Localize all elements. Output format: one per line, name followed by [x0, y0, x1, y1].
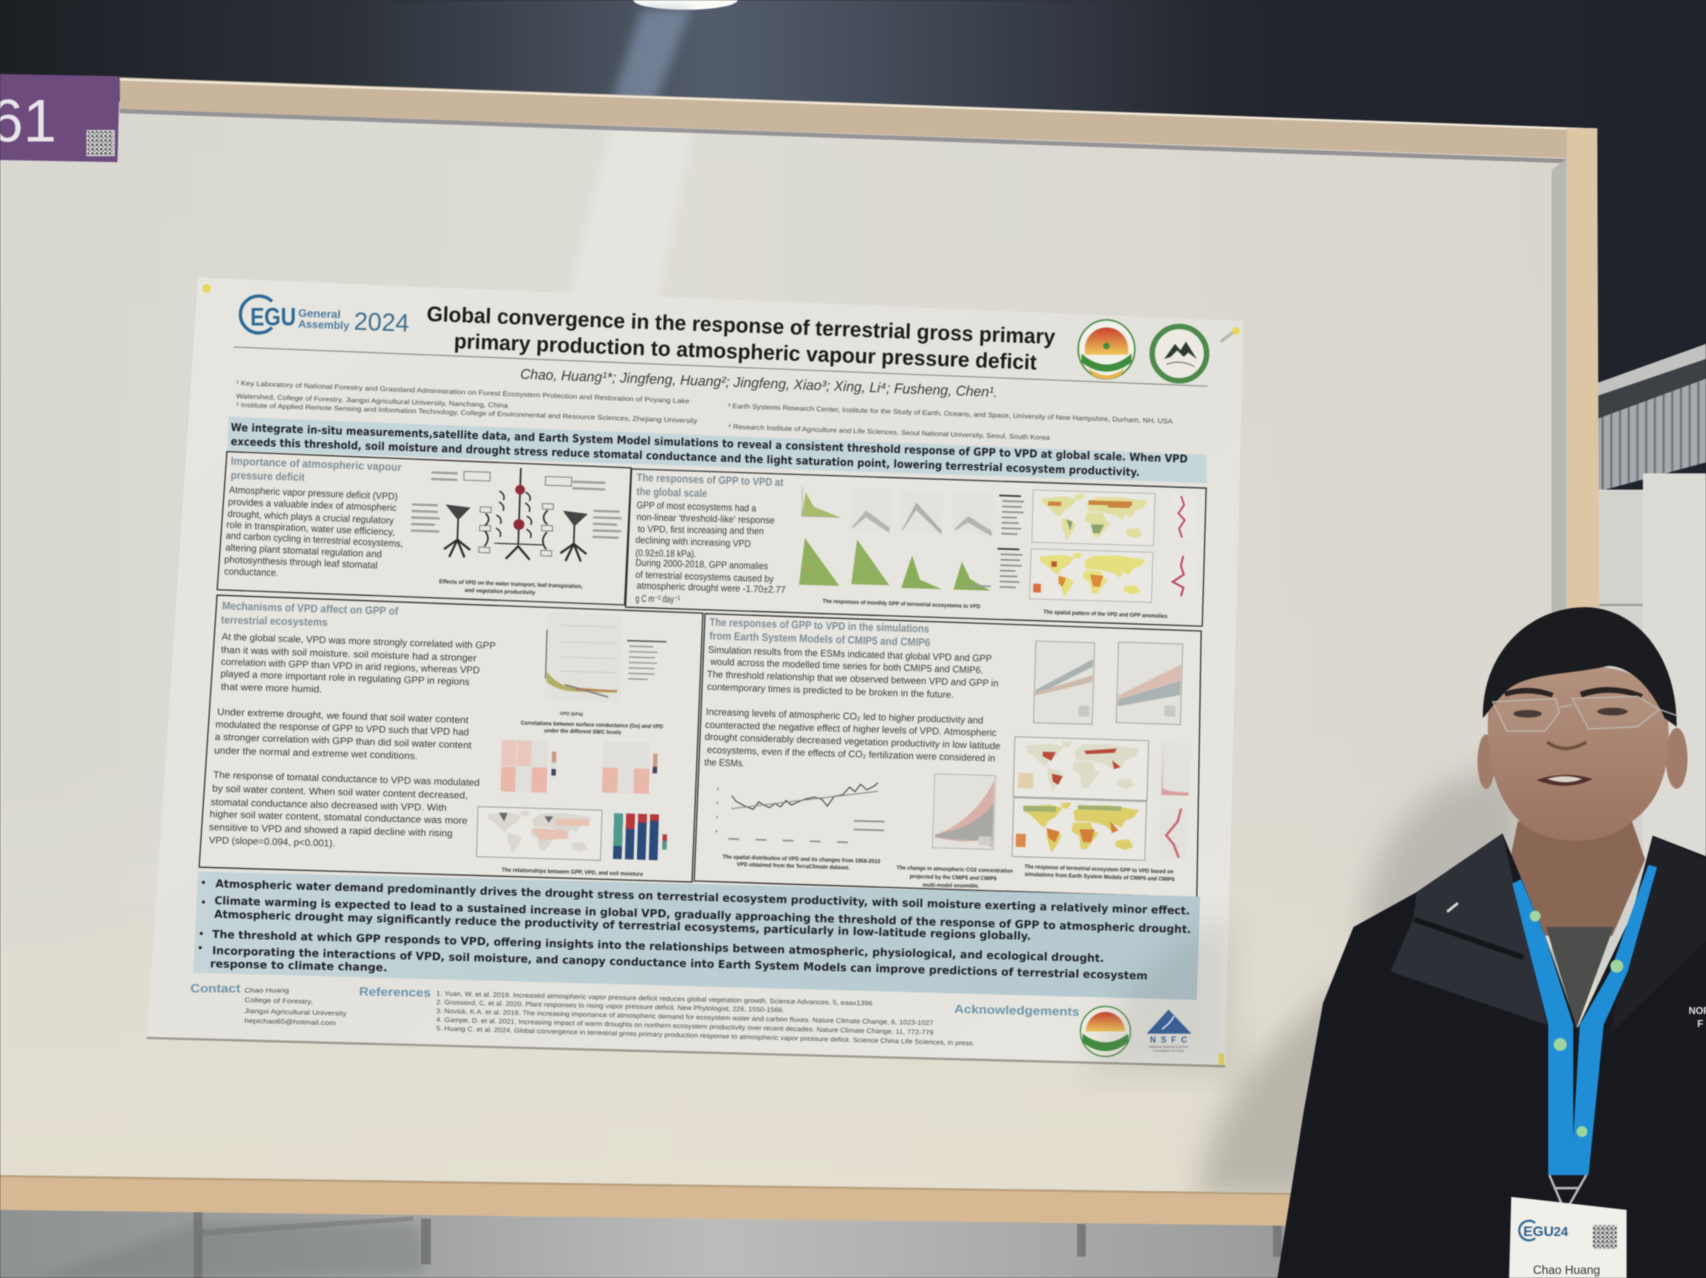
ears [1478, 728, 1688, 789]
legends: ecosystem type lists [996, 495, 1024, 588]
light reflection on board [560, 114, 696, 326]
contact: Jiangxi Agricultural University [244, 1008, 348, 1018]
text block: mechanisms paragraph 2: Under extreme drought, we found that soil water content [217, 707, 469, 726]
logo: EGU General Assembly 2024 [240, 296, 410, 338]
text block: importance body: provides a valuable index of atmospheric [228, 497, 397, 514]
logo: NSFC: NSFC [1150, 1035, 1187, 1044]
caption: simulated response: The response of terrestrial ecosystem GPP to VPD based on [1024, 864, 1174, 875]
caption: simulated response: simulations from Earth System Models of CMIP5 and CMIP6 [1024, 872, 1175, 883]
map: relationships between GPP, VPD and soil moisture [476, 807, 602, 860]
panel: mechanisms of VPD affect on GPP [199, 595, 703, 882]
logo: EGU General Assembly 2024: 2024 [353, 308, 410, 338]
ventilation duct and wall at right [1597, 344, 1706, 1251]
chart a: VPD projection [1033, 641, 1095, 724]
jacket collar [1390, 833, 1547, 1025]
chart: surface conductance versus VPD [544, 612, 667, 720]
contact: College of Forestry, [244, 997, 313, 1006]
chart: correlation heatmap b [602, 741, 658, 794]
contact [190, 981, 348, 1027]
captions: time series and CO2: projected by the CMIP5 and CMIP6 [910, 874, 997, 882]
text block: CMIP paragraph 1: Simulation results from the ESMs indicated that global VPD and GPP [708, 645, 992, 665]
heading: mechanisms: terrestrial ecosystems [221, 614, 328, 629]
heading: CMIP [709, 617, 930, 649]
text block: responses body: During 2000-2018, GPP anomalies [635, 558, 768, 572]
heading: importance: pressure deficit [231, 470, 305, 484]
panel: the responses of GPP to VPD at the global scale [626, 469, 1206, 626]
text block: responses body: of terrestrial ecosystems caused by [635, 570, 774, 585]
text block: mechanisms paragraph 2: a stronger correlation with GPP than did soil water content [215, 732, 472, 751]
floor [0, 1202, 1306, 1278]
chart: VPD anomaly latitude profile [1169, 495, 1197, 540]
name badge [1509, 1197, 1627, 1278]
heading: importance: Importance of atmospheric vapour [231, 456, 402, 474]
text block: responses body: to VPD, first increasing and then [638, 524, 764, 537]
text block: mechanisms paragraph 3: sensitive to VPD and showed a rapid decline with rising [209, 822, 453, 840]
nose [1547, 742, 1586, 749]
text block: importance body [224, 485, 403, 579]
text block: mechanisms paragraph 3: higher soil water content, stomatal conductance was more [210, 809, 468, 827]
mouth [1536, 775, 1593, 786]
text block: mechanisms paragraph 3: The response of tomatal conductance to VPD was modulated [213, 770, 480, 789]
text block: importance body: conductance. [224, 566, 279, 579]
references: 4. Gampe, D. et al. 2021. Increasing impact of warm droughts on northern ecosystem productivity over recent decades. Nature Climate Change, 11, 772-779 [436, 1017, 934, 1037]
summary band: exceeds this threshold, soil moisture and drought stress reduce stomatal conductance and the light saturation point, lowering terrestrial ecosystem productivity. [231, 435, 1140, 479]
text block: mechanisms paragraph 3: by soil water content. When soil water content decreased, [212, 784, 468, 802]
text block: responses body: (0.92±0.18 kPa). [635, 548, 696, 560]
affiliations: Watershed, College of Forestry, Jiangxi Agricultural University, Nanchang, China [236, 393, 508, 410]
references: 5. Huang C. et al. 2024. Global convergence in terrestrial gross primary production response to atmospheric vapor pressure deficit. Science China Life Sciences, in press. [436, 1025, 975, 1047]
captions: time series and CO2: The change in atmospheric CO2 concentration [896, 865, 1014, 875]
caption: simulated response [1024, 864, 1175, 883]
panel: responses of GPP to VPD in CMIP5 and CMIP6 [694, 614, 1201, 898]
poster sheet [147, 277, 1244, 1067]
caption: conductance chart [521, 721, 663, 736]
panel: importance of atmospheric vapour pressure deficit [217, 452, 631, 605]
captions: time series and CO2: VPD obtained from the TerraClimate dataset. [737, 862, 850, 871]
logo: Jiangxi Agricultural University [1078, 320, 1135, 379]
affiliations: ¹ Key Laboratory of National Forestry and Grassland Administration on Forest Ecosystem Protection and Restoration of Poyang Lake [236, 380, 690, 405]
text block: importance body: role in transpiration, water use efficiency, [226, 520, 395, 538]
chart: surface conductance versus VPD: VPD (kPa) [560, 711, 583, 718]
text block: mechanisms paragraph 1: that were more humid. [221, 682, 322, 695]
ceiling lamp [609, 0, 738, 109]
text block: mechanisms paragraph 1: At the global scale, VPD was more strongly correlated with GPP [222, 632, 496, 652]
glasses [1493, 696, 1678, 731]
person presenting the poster [1277, 607, 1706, 1278]
lanyard clip [1549, 1175, 1586, 1206]
text block: responses body [635, 500, 786, 605]
captions: responses panel: The responses of monthly GPP of terrestrial ecosystems to VPD [822, 599, 980, 610]
chart: monthly GPP response small multiples, bottom row [799, 538, 992, 591]
text block: mechanisms paragraph 1 [220, 632, 496, 695]
text block: importance body: photosynthesis through leaf stomatal [224, 555, 378, 571]
references: 2. Grossiord, C. et al. 2020. Plant responses to rising vapor pressure deficit. New Phytologist, 226, 1550-1566. [436, 999, 785, 1014]
acknowledgements: Acknowledgements [954, 1002, 1080, 1019]
references: References [359, 985, 431, 1000]
text block: mechanisms paragraph 3 [209, 770, 480, 850]
summary band [227, 417, 1207, 483]
contact: hepichao65@hotmail.com [244, 1018, 336, 1027]
chart: correlation heatmap a [500, 739, 557, 793]
map: spatial pattern of GPP anomalies [1030, 549, 1153, 602]
heading: CMIP: The responses of GPP to VPD in the simulations [709, 617, 929, 636]
text block: conclusions: Atmospheric drought may significantly reduce the productivity of terrestrial ecosystems, particularly in low-latitude regions globally. [214, 908, 1031, 943]
text block: mechanisms paragraph 1: played a more important role in regulating GPP in regions [220, 669, 470, 688]
name badge: EGU [1523, 1223, 1554, 1239]
header rule [234, 347, 1208, 386]
text block: conclusions: Climate warming is expected to lead to a sustained increase in global VPD, gradually approaching the threshold of the response of GPP to atmospheric drought. [214, 894, 1191, 936]
text block: responses body: g C m⁻² day⁻¹ [635, 594, 680, 605]
caption: plant diagram [439, 579, 583, 596]
conclusions band [193, 872, 1200, 1000]
map c: change in GPP response [1013, 737, 1149, 801]
logo: university, footer [1080, 1006, 1130, 1056]
chart: GPP anomaly latitude profile [1167, 554, 1196, 599]
affiliations: ⁴ Research Institute of Agriculture and Life Sciences, Seoul National University, Seoul, South Korea [728, 424, 1050, 442]
chart d: latitude profile [1159, 743, 1191, 796]
text block: mechanisms paragraph 3: VPD (slope=0.094, p<0.001). [209, 835, 335, 850]
face [1488, 666, 1669, 841]
text block: conclusions: Incorporating the interactions of VPD, soil moisture, and canopy conductance into Earth System Models can improve predictions of terrestrial ecosystem [212, 944, 1148, 983]
caption: plant diagram: Effects of VPD on the water transport, leaf transpiration, [439, 579, 583, 590]
logo: forestry college mountain seal [1152, 326, 1207, 381]
map: spatial pattern of VPD anomalies [1032, 490, 1155, 546]
neck [1510, 821, 1645, 936]
heading: responses: the global scale [636, 486, 707, 500]
caption: relationships: The relationships between GPP, VPD, and soil moisture [502, 868, 643, 878]
name badge: Chao Huang [1533, 1263, 1600, 1277]
text block: CMIP paragraph 1: would across the modelled time series for both CMIP5 and CMIP6. [709, 657, 983, 676]
text block: importance body: and carbon cycling in terrestrial ecosystems, [226, 531, 403, 550]
captions: time series and CO2: multi-model ensemble. [923, 883, 980, 890]
chart: monthly GPP response small multiples, top row [801, 487, 994, 536]
contact: Contact [190, 981, 240, 995]
map e: GPP response to VPD in simulations [1012, 798, 1147, 860]
text block: CMIP paragraph 2: the ESMs. [704, 757, 745, 769]
board support legs [33, 1210, 1282, 1278]
captions: time series and CO2: The spatial distribution of VPD and its changes from 1958-2010 [722, 854, 880, 865]
title [426, 303, 1056, 375]
eyebrows [1504, 687, 1643, 699]
icon: QR code [87, 131, 114, 156]
text block: conclusions: The threshold at which GPP responds to VPD, offering insights into the relationships between atmospheric, physiological, and ecological drought. [212, 928, 1104, 965]
text block: responses body: non-linear 'threshold-like' response [636, 512, 775, 526]
logo: NSFC [1147, 1010, 1191, 1053]
chart: VPD time series 1958-2010 [716, 778, 886, 844]
push pins [202, 284, 1240, 1065]
references [359, 985, 975, 1047]
text block: mechanisms paragraph 1: than it was with soil moisture. soil moisture had a stronger [221, 645, 478, 664]
heading: responses: The responses of GPP to VPD at [636, 472, 784, 489]
t-shirt [1546, 927, 1614, 1028]
logo: EGU General Assembly 2024: General [298, 308, 341, 321]
references: 1. Yuan, W. et al. 2019. Increased atmospheric vapor pressure deficit reduces global vegetation growth. Science Advances, 5, eaax1396 [436, 991, 873, 1007]
affiliations: ³ Earth Systems Research Center, Institute for the Study of Earth, Oceans, and Space, University of New Hampshire, Durham, NH, USA [728, 403, 1173, 426]
text block: CMIP paragraph 2: counteracted the negative effect of higher levels of VPD. Atmospheric [705, 720, 997, 739]
text block: CMIP paragraph 2: Increasing levels of atmospheric CO₂ led to higher productivity and [706, 707, 983, 727]
captions: time series and CO2 [722, 854, 1014, 890]
jacket logo: F [1697, 1019, 1703, 1030]
authors: Chao, Huang¹*; Jingfeng, Huang²; Jingfeng, Xiao³; Xing, Li⁴; Fusheng, Chen¹. [520, 366, 998, 400]
affiliations: ² Institute of Applied Remote Sensing and Information Technology, College of Environmental and Resource Sciences, Zhejiang University [236, 402, 698, 425]
heading: mechanisms: Mechanisms of VPD affect on GPP of [222, 600, 399, 618]
eyes [1513, 708, 1628, 718]
text block: mechanisms paragraph 2: under the normal and extreme wet conditions. [214, 745, 418, 762]
chart f: latitude profile [1159, 807, 1188, 860]
hair [1483, 607, 1677, 727]
chart: atmospheric CO2 projection [932, 774, 996, 850]
heading: responses [636, 472, 784, 500]
heading: CMIP: from Earth System Models of CMIP5 and CMIP6 [709, 630, 930, 649]
text block: CMIP paragraph 1: The threshold relationship that we observed between VPD and GPP in [707, 669, 999, 689]
chart: stacked bars [613, 813, 668, 860]
text block: CMIP paragraph 1 [707, 645, 999, 701]
text block: conclusions: response to climate change. [210, 957, 388, 974]
captions: responses panel: The spatial pattern of the VPD and GPP anomalies [1043, 610, 1167, 620]
person's shadow on board [1197, 771, 1523, 1197]
affiliations [236, 380, 1173, 442]
text block: conclusions [210, 877, 1191, 983]
text block: conclusions: Atmospheric water demand predominantly drives the drought stress on terrestrial ecosystem productivity, with soil moisture exerting a relatively minor effect. [215, 877, 1190, 918]
text block: mechanisms paragraph 1: correlation with GPP than VPD in arid regions, whereas VPD [221, 657, 480, 676]
chart: plant water transport diagram [410, 464, 623, 563]
soft shadow over poster lower right [1088, 914, 1240, 1077]
logo: EGU General Assembly 2024: EGU [250, 303, 296, 331]
heading: mechanisms [221, 600, 399, 629]
text block: CMIP paragraph 2: drought considerably decreased vegetation productivity in low latitude [705, 732, 1001, 752]
text block: CMIP paragraph 2: ecosystems, even if the effects of CO₂ fertilization were considered in [707, 745, 995, 764]
references: 3. Novick, K.A. et al. 2016. The increasing importance of atmospheric demand for ecosystem water and carbon fluxes. Nature Climate Change, 6, 1023-1027 [436, 1008, 934, 1027]
dark ceiling background [0, 0, 1706, 544]
text block: importance body: drought, which plays a crucial regulatory [227, 509, 394, 527]
logo: NSFC: Foundation of China [1153, 1049, 1184, 1053]
logo: EGU General Assembly 2024: Assembly [298, 319, 350, 332]
text block: mechanisms paragraph 2 [214, 707, 472, 762]
captions: responses panel [822, 599, 1167, 620]
summary band: We integrate in-situ measurements,satellite data, and Earth System Model simulations to reveal a consistent threshold response of GPP to VPD at global scale. When VPD [231, 421, 1188, 466]
heading: importance [231, 456, 402, 484]
purple poster number sign [0, 74, 120, 162]
lanyard [1512, 865, 1657, 1175]
contact: Chao Huang [244, 987, 289, 994]
text block: mechanisms paragraph 2: modulated the response of GPP to VPD such that VPD had [215, 719, 469, 738]
logo: NSFC: National Natural Science [1149, 1045, 1188, 1049]
text block: mechanisms paragraph 3: stomatal conductance also decreased with VPD. With [211, 797, 447, 814]
text block: importance body: Atmospheric vapor pressure deficit (VPD) [229, 485, 398, 503]
text block: importance body: altering plant stomatal regulation and [225, 543, 382, 560]
text block: CMIP paragraph 2 [704, 707, 1001, 769]
text block: responses body: declining with increasing VPD [635, 535, 751, 550]
title: Global convergence in the response of terrestrial gross primary [426, 303, 1056, 349]
text block: responses body: GPP of most ecosystems had a [636, 500, 757, 514]
caption: conductance chart: under the different SWC levels [544, 728, 621, 736]
jacket [1277, 833, 1706, 1278]
caption: conductance chart: Correlations between surface conductance (Gs) and VPD [521, 721, 663, 730]
text block: CMIP paragraph 1: contemporary times is predicted to be broken in the future. [707, 682, 954, 701]
title: primary production to atmospheric vapour pressure deficit [454, 330, 1037, 375]
jacket logo [1689, 1006, 1706, 1030]
caption: plant diagram: and vegetation productivity [465, 588, 536, 596]
name badge: 24 [1554, 1224, 1569, 1239]
text block: responses body: atmospheric drought were -1.70±2.77 [636, 581, 786, 596]
chart b: GPP projection [1116, 642, 1183, 724]
bullets [199, 881, 205, 949]
